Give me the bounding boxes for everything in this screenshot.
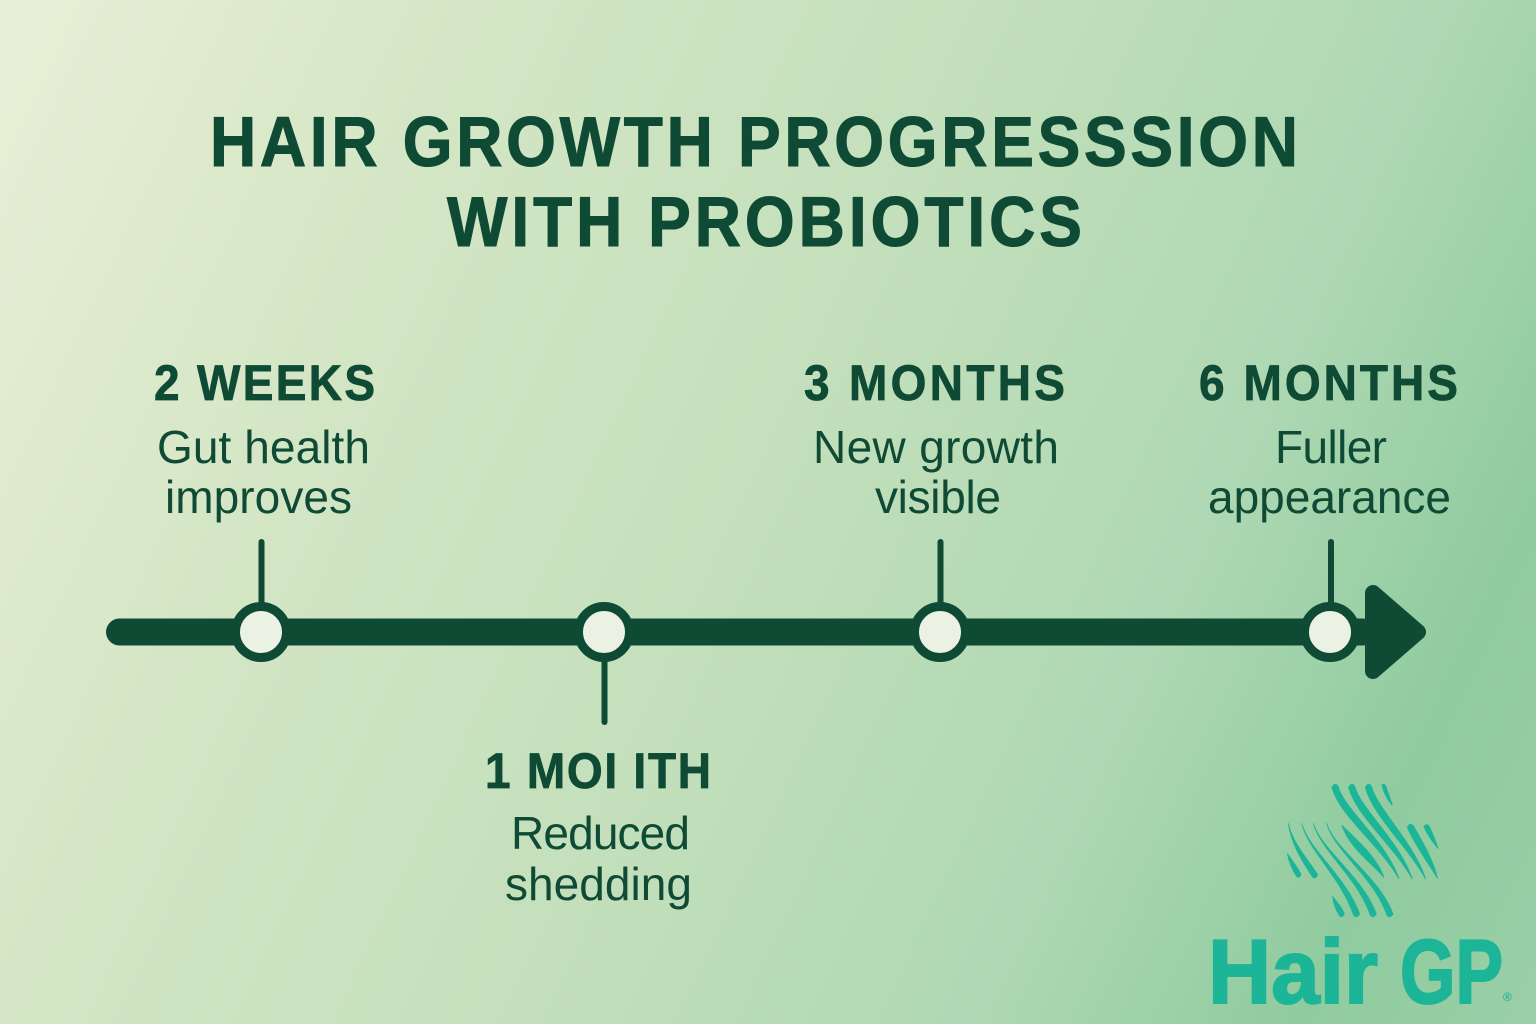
milestone: 1 month <box>485 606 711 910</box>
label: 1 month: 1 MOI ITH <box>485 743 711 799</box>
wordmark: Hair <box>1208 922 1378 1023</box>
milestone: 2 weeks <box>154 355 375 658</box>
logo: Hair GP <box>1208 784 1512 1023</box>
description: gut health improves: Gut health <box>157 421 370 473</box>
description: fuller appearance: appearance <box>1208 471 1451 523</box>
timeline arrow <box>106 593 1418 671</box>
marker: 3 months <box>914 539 966 658</box>
title <box>210 103 1298 262</box>
description: new growth visible <box>813 421 1059 523</box>
label: 3 months: 3 MONTHS <box>804 355 1065 411</box>
wordmark: GP <box>1400 922 1503 1023</box>
description: reduced shedding: Reduced <box>511 807 690 859</box>
registered mark: ® <box>1503 990 1512 1004</box>
description: new growth visible: New growth <box>813 421 1059 473</box>
description: gut health improves <box>157 421 370 523</box>
marker: 2 weeks <box>236 539 286 658</box>
description: reduced shedding <box>505 807 692 910</box>
milestone: 6 months <box>1199 355 1458 658</box>
marker: 1 month <box>578 606 630 725</box>
wordmark <box>1208 922 1503 1023</box>
title: WITH PROBIOTICS <box>447 183 1082 262</box>
title: HAIR GROWTH PROGRESSSION <box>210 103 1298 182</box>
icon: hair strands cross <box>1287 784 1438 917</box>
description: fuller appearance <box>1208 421 1451 523</box>
marker: 6 months <box>1304 539 1356 658</box>
label: 2 weeks: 2 WEEKS <box>154 355 375 411</box>
description: fuller appearance: Fuller <box>1275 421 1387 473</box>
description: reduced shedding: shedding <box>505 858 692 910</box>
description: new growth visible: visible <box>875 471 1001 523</box>
label: 6 months: 6 MONTHS <box>1199 355 1458 411</box>
description: gut health improves: improves <box>165 471 352 523</box>
milestone: 3 months <box>804 355 1065 658</box>
